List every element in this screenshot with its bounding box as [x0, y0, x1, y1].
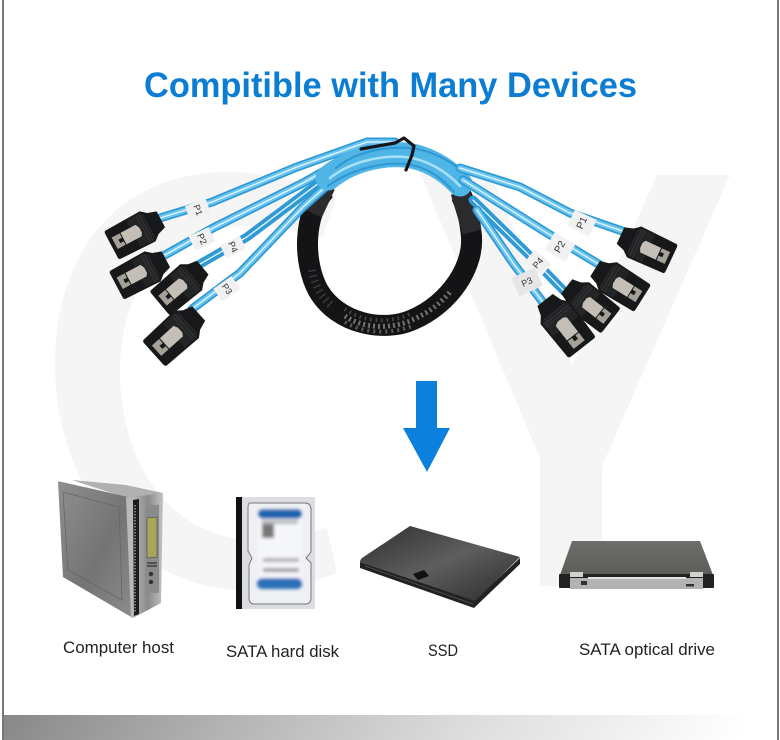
left P3 connector	[141, 300, 211, 368]
bottom gradient bar	[4, 715, 777, 740]
SATA breakout cable	[103, 138, 678, 368]
right label P3: P3	[520, 275, 534, 289]
caption: SATA optical drive: SATA optical drive	[579, 641, 715, 659]
caption: computer host: Computer host	[63, 639, 174, 657]
caption: SSD: SSD	[428, 642, 458, 660]
right blue wire fan	[460, 168, 625, 305]
caption: SATA hard disk: SATA hard disk	[226, 643, 340, 661]
right label P2: P2	[553, 239, 568, 255]
left P2 connector	[108, 244, 174, 301]
left label P2: P2	[195, 232, 209, 246]
right label P2	[545, 232, 575, 262]
right P2 connector	[586, 254, 652, 313]
central blue wire bundle	[328, 148, 466, 192]
right label P4: P4	[531, 256, 545, 270]
left label P4	[220, 236, 246, 258]
right P4 connector	[556, 273, 621, 334]
blurred label	[257, 508, 302, 589]
watermark letter Y	[420, 173, 730, 586]
down arrow	[403, 381, 450, 472]
braided sleeve loop	[308, 186, 472, 332]
left label P3: P3	[220, 282, 234, 296]
right label P3	[511, 267, 543, 297]
left P1 connector	[103, 204, 169, 261]
icon: SATA optical drive	[559, 541, 714, 589]
left label P4: P4	[226, 240, 240, 254]
right label P4	[524, 250, 552, 276]
title: Compitible with Many Devices	[144, 66, 637, 105]
right label P1: P1	[575, 215, 590, 231]
left P4 connector	[149, 255, 214, 317]
right P3 connector	[531, 289, 597, 359]
left label P2	[189, 227, 215, 251]
cable tie	[361, 138, 414, 170]
right label P1	[567, 210, 597, 236]
left label P1	[185, 199, 211, 221]
left label P3	[213, 276, 241, 302]
left blue wire fan	[160, 142, 395, 309]
display	[147, 517, 157, 558]
watermark letter C	[55, 172, 337, 590]
icon: SATA hard disk	[236, 497, 315, 609]
right P1 connector	[613, 220, 678, 275]
icon: computer host	[58, 480, 163, 618]
left label P1: P1	[191, 203, 205, 217]
icon: SSD	[360, 526, 520, 608]
